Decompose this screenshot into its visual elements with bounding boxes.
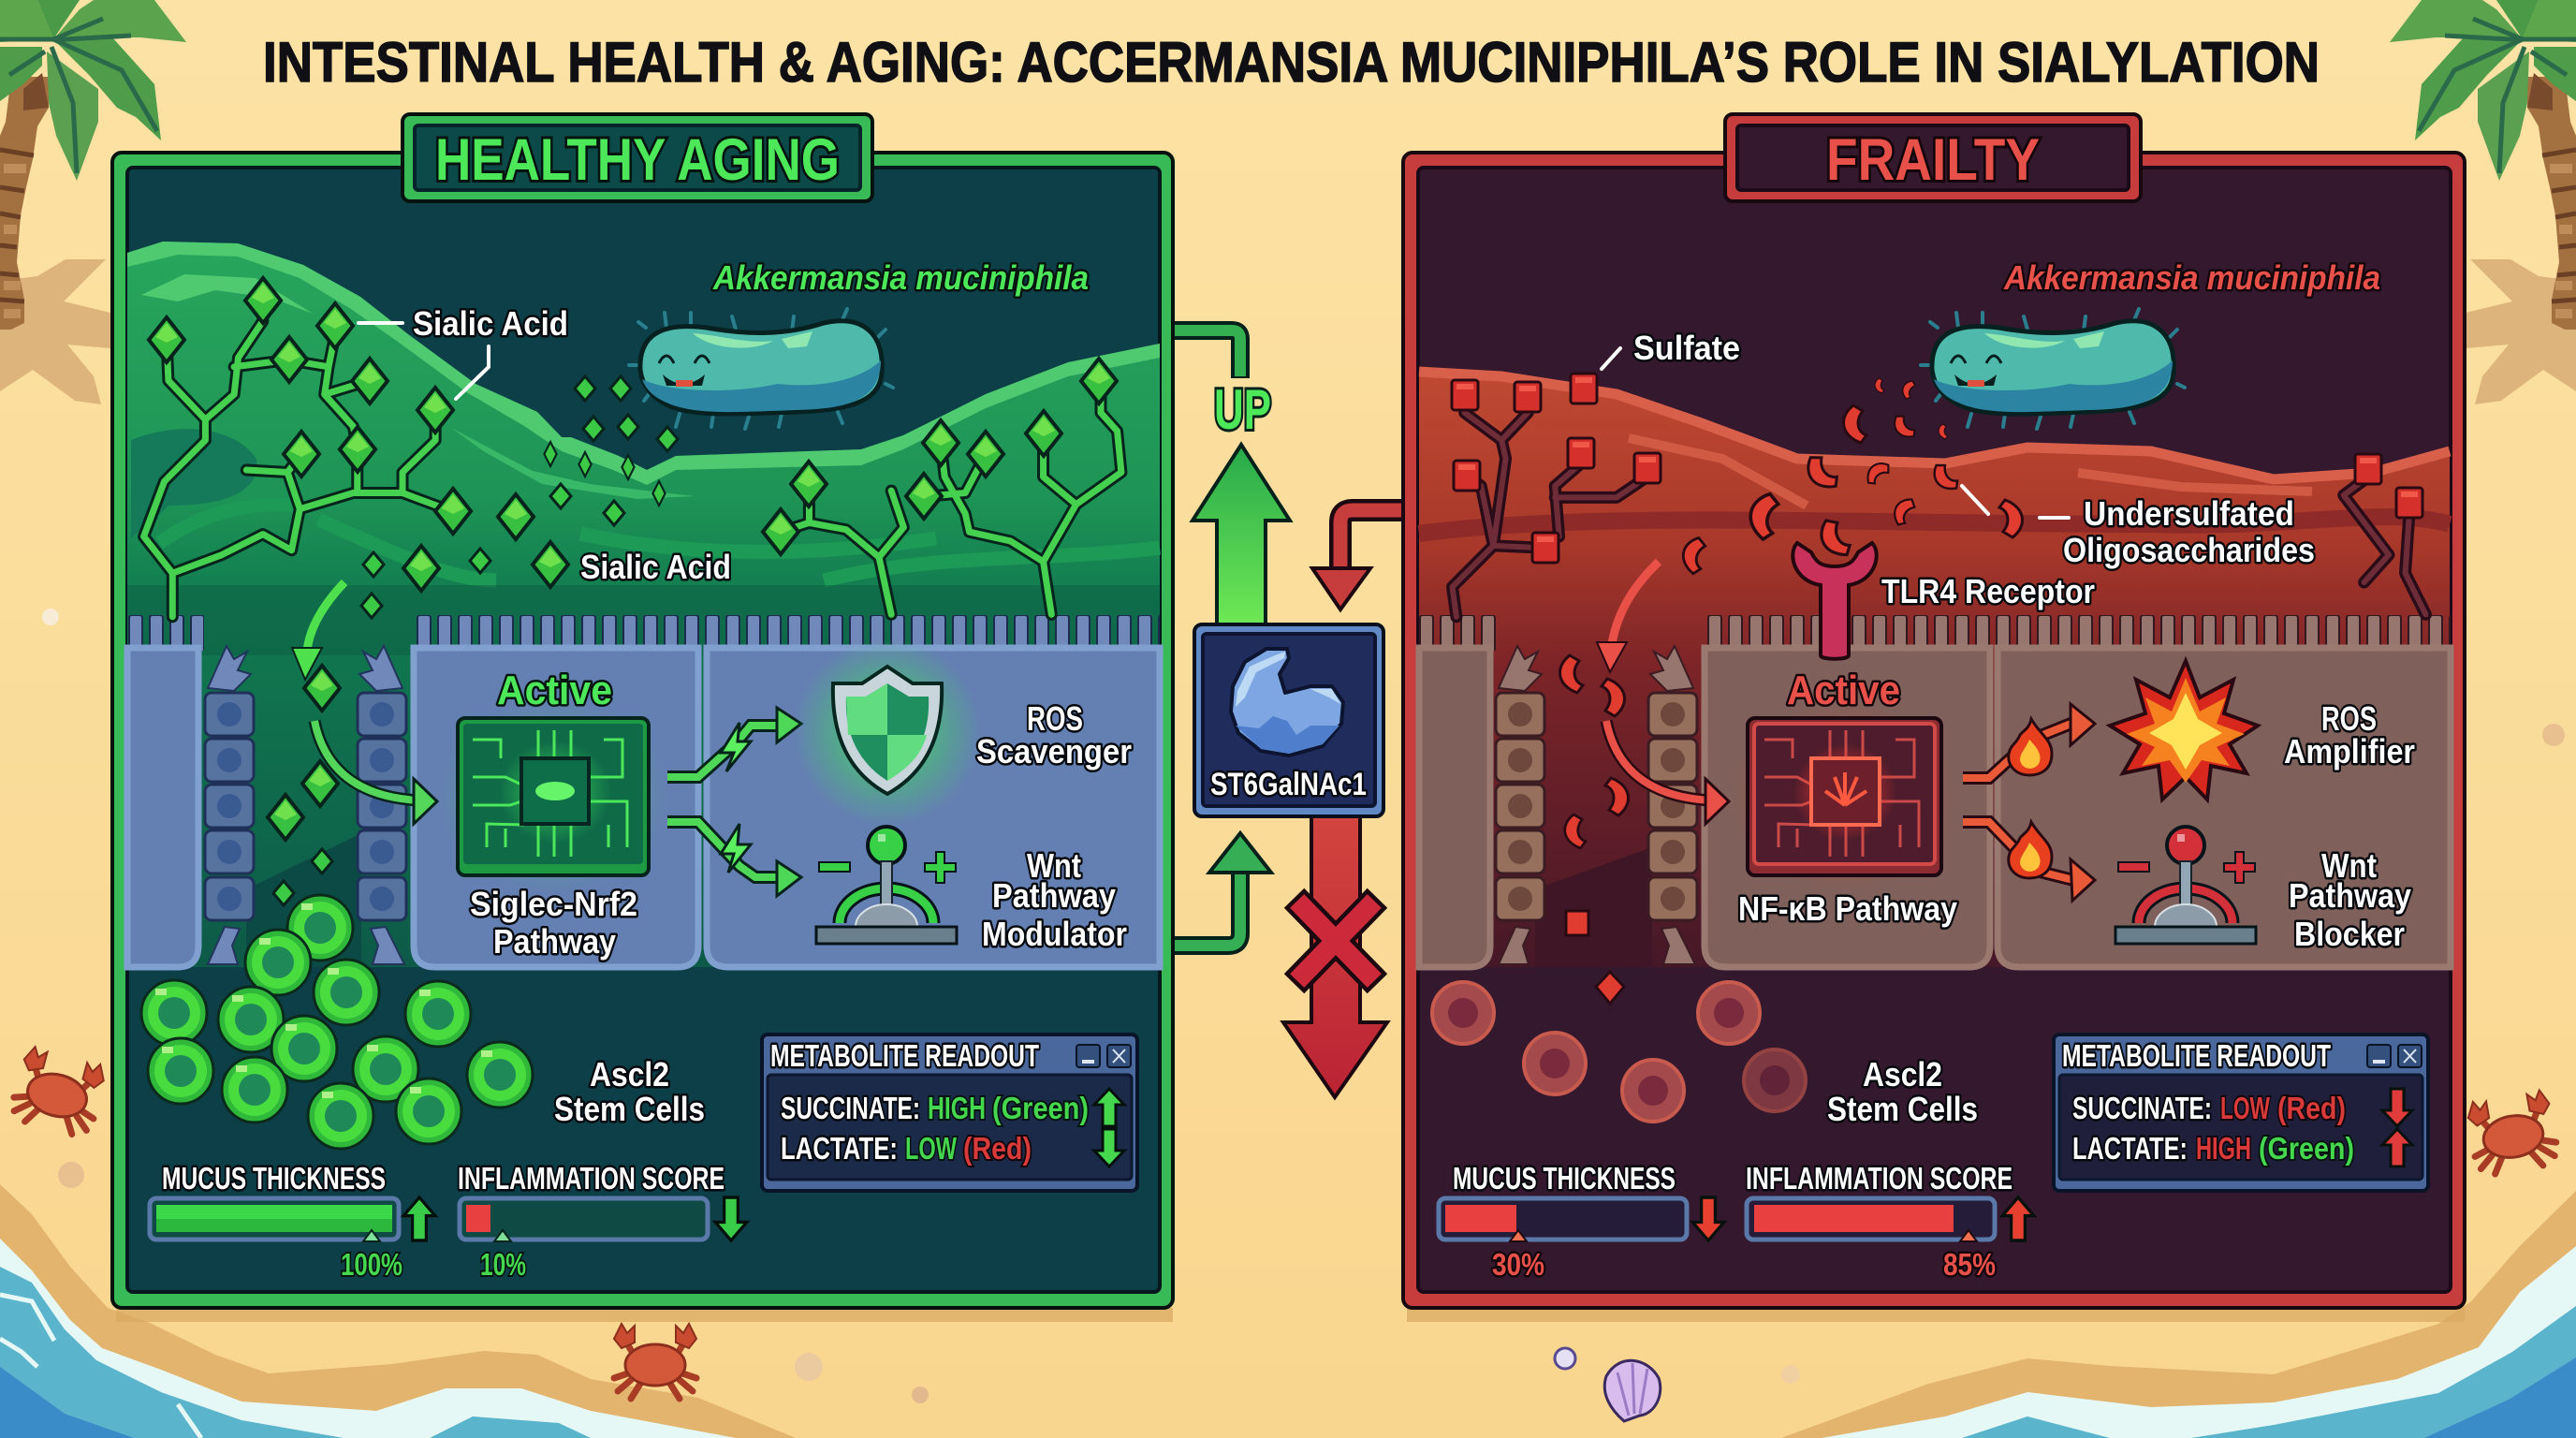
- label: Ascl2 Stem Cells: Ascl2: [1863, 1055, 1942, 1093]
- label: Wnt Pathway Modulator: Modulator: [982, 915, 1127, 953]
- label: Siglec-Nrf2 Pathway: Pathway: [493, 922, 616, 961]
- label: ROS Scavenger: [976, 699, 1132, 770]
- microvilli comb: [1419, 615, 2451, 651]
- label: Ascl2 Stem Cells: [554, 1055, 705, 1128]
- label: ROS Scavenger: ROS: [1027, 699, 1083, 738]
- metabolite readout: SUCCINATE:: [781, 1091, 920, 1125]
- bacterium: [1921, 309, 2185, 429]
- label: Sialic Acid top: Sialic Acid: [413, 304, 568, 343]
- crypt cells: [1496, 646, 1697, 964]
- crypt cells: [205, 646, 406, 964]
- gauge: mucus thickness: [1439, 1161, 1724, 1282]
- icon: explosion: [2110, 661, 2258, 800]
- gauge: mucus thickness: 100%: [341, 1247, 402, 1282]
- label: Wnt Pathway Blocker: Pathway: [2289, 876, 2411, 915]
- microvilli comb: [127, 615, 1160, 651]
- label: Undersulfated Oligosaccharides: Undersulfated: [2084, 494, 2294, 533]
- metabolite readout: SUCCINATE:: [2072, 1091, 2212, 1125]
- panel shadows on the sand: [116, 1308, 2465, 1322]
- label: Undersulfated Oligosaccharides: [2063, 494, 2315, 569]
- icon: lever modulator: [816, 827, 957, 944]
- connector: frailty panel to enzyme: [1312, 510, 1403, 609]
- stem cells: [141, 895, 533, 1149]
- metabolite readout: METABOLITE READOUT: [2062, 1038, 2331, 1073]
- label: Wnt Pathway Blocker: [2289, 846, 2411, 953]
- metabolite readout: METABOLITE READOUT: [770, 1038, 1039, 1073]
- arrows: flame to explosion and lever: [1963, 704, 2095, 901]
- gauge: inflammation score: [458, 1161, 747, 1282]
- arrow: sialic acid into the cell: [315, 721, 437, 824]
- gauge: mucus thickness: MUCUS THICKNESS: [1453, 1161, 1676, 1196]
- label: ROS Amplifier: ROS: [2321, 699, 2377, 738]
- metabolite readout: LOW: [905, 1131, 958, 1166]
- gauge: inflammation score: 85%: [1943, 1247, 1996, 1282]
- label: Wnt Pathway Modulator: Pathway: [992, 876, 1116, 915]
- glycan trees degraded: [1453, 413, 2425, 617]
- gauge: inflammation score: 10%: [480, 1247, 526, 1282]
- label: Sialic Acid lower: Sialic Acid: [580, 548, 731, 586]
- TLR4 receptor: [1793, 516, 1877, 659]
- label: Active: Active: [497, 668, 612, 713]
- mucus layer: [127, 242, 1160, 967]
- epithelial cells: [1419, 648, 2451, 967]
- label: Siglec-Nrf2 Pathway: Siglec-Nrf2: [470, 885, 637, 923]
- crab right: [2466, 1089, 2560, 1177]
- label: Active: Active: [1787, 668, 1900, 713]
- undersulfated fragments: [1560, 378, 2022, 1004]
- label: ROS Amplifier: Amplifier: [2284, 732, 2415, 770]
- arrow: red down blocked: [1283, 816, 1387, 1097]
- label: Ascl2 Stem Cells: Stem Cells: [554, 1090, 705, 1128]
- connector: healthy panel to enzyme up: [1173, 833, 1271, 946]
- pebbles: [42, 609, 2565, 1403]
- callout: lines: [1602, 348, 2069, 518]
- label: Wnt Pathway Modulator: [982, 846, 1127, 953]
- chip: NF-kB: [1732, 702, 1956, 889]
- sialic acid diamonds: [149, 278, 1117, 905]
- metabolite readout: [762, 1034, 1137, 1191]
- heading: HEALTHY AGING: HEALTHY AGING: [435, 127, 840, 193]
- chip: Siglec-Nrf2: [438, 700, 668, 893]
- shoreline left: [0, 1184, 796, 1438]
- metabolite readout: HIGH: [2196, 1131, 2251, 1166]
- gauge: mucus thickness: MUCUS THICKNESS: [162, 1161, 386, 1196]
- icon: flames: [2009, 719, 2052, 878]
- gauge: inflammation score: INFLAMMATION SCORE: [458, 1161, 724, 1196]
- icon: lever blocker: [2115, 827, 2256, 944]
- label: Sulfate: Sulfate: [1633, 329, 1740, 367]
- metabolite readout: LOW: [2220, 1091, 2271, 1125]
- arrow: small curved: [1597, 562, 1659, 672]
- label: NF-kB Pathway: NF-κB Pathway: [1738, 889, 1957, 928]
- label: Wnt Pathway Modulator: Wnt: [1027, 846, 1081, 885]
- gauge: inflammation score: INFLAMMATION SCORE: [1746, 1161, 2012, 1196]
- label: Siglec-Nrf2 Pathway: [470, 885, 637, 961]
- sulfate squares: [1452, 374, 2422, 563]
- bacterium: [629, 309, 893, 429]
- metabolite readout: (Green): [2259, 1131, 2354, 1166]
- gauge: mucus thickness: 30%: [1492, 1247, 1544, 1282]
- metabolite readout: (Red): [963, 1131, 1032, 1166]
- icon: enzyme blob: [1231, 649, 1343, 756]
- arrow: fragments into the cell: [1606, 721, 1729, 824]
- label: Akkermansia: Akkermansia muciniphila: [2003, 258, 2380, 297]
- icon: shield: [794, 638, 981, 826]
- callout: sialic acid line: [359, 323, 489, 399]
- label: Undersulfated Oligosaccharides: Oligosaccharides: [2063, 531, 2315, 569]
- metabolite readout: HIGH: [928, 1091, 986, 1125]
- enzyme box: ST6GalNAc1: [1194, 624, 1383, 816]
- arrows: lightning to shield and lever: [667, 708, 801, 896]
- label: ROS Amplifier: [2284, 699, 2415, 770]
- gauge: inflammation score: [1746, 1161, 2034, 1282]
- metabolite readout: (Green): [992, 1091, 1089, 1125]
- heading: FRAILTY: FRAILTY: [1826, 127, 2040, 193]
- palm tree right: [2390, 0, 2576, 404]
- label: ST6GalNAc1: ST6GalNAc1: [1210, 767, 1367, 802]
- label: Ascl2 Stem Cells: Ascl2: [590, 1055, 669, 1093]
- metabolite readout: LACTATE:: [2072, 1131, 2188, 1166]
- label: Wnt Pathway Blocker: Blocker: [2294, 915, 2405, 953]
- palm tree left: [0, 0, 186, 404]
- label: ROS Scavenger: Scavenger: [976, 732, 1132, 770]
- panel tab: frailty: [1725, 114, 2141, 201]
- label: Wnt Pathway Blocker: Wnt: [2321, 846, 2377, 885]
- icon: red X: [1304, 908, 1368, 974]
- gauge: mucus thickness: [150, 1161, 435, 1282]
- label: Ascl2 Stem Cells: Stem Cells: [1827, 1090, 1978, 1128]
- icon: seashell: [1604, 1360, 1661, 1421]
- panel: healthy aging: [112, 153, 1173, 1308]
- panel: frailty: [1403, 153, 2465, 1308]
- stem cells faded: [1432, 982, 1806, 1122]
- arrow: big green up: [1193, 445, 1290, 625]
- metabolite readout: LACTATE:: [781, 1131, 898, 1166]
- metabolite readout: [2054, 1034, 2428, 1191]
- metabolite readout: (Red): [2277, 1091, 2346, 1125]
- shoreline right: [1781, 1191, 2576, 1438]
- title: INTESTINAL HEALTH & AGING: ACCERMANSIA MUCINIPHILA’S ROLE IN SIALYLATION: [263, 31, 2320, 94]
- label: UP: UP: [1214, 378, 1271, 441]
- crab left: [8, 1045, 108, 1138]
- crab bottom: [614, 1324, 696, 1399]
- arrow: small curved: [292, 582, 344, 680]
- glycan trees: [144, 301, 1121, 617]
- panel tab: healthy aging: [402, 114, 872, 201]
- label: TLR4 Receptor: TLR4 Receptor: [1881, 572, 2095, 610]
- epithelial cells: [127, 648, 1160, 967]
- connector: healthy panel to UP arrow: [1170, 330, 1240, 378]
- mucus layer: [1419, 372, 2450, 967]
- label: Akkermansia: Akkermansia muciniphila: [712, 258, 1089, 297]
- label: Ascl2 Stem Cells: [1827, 1055, 1978, 1128]
